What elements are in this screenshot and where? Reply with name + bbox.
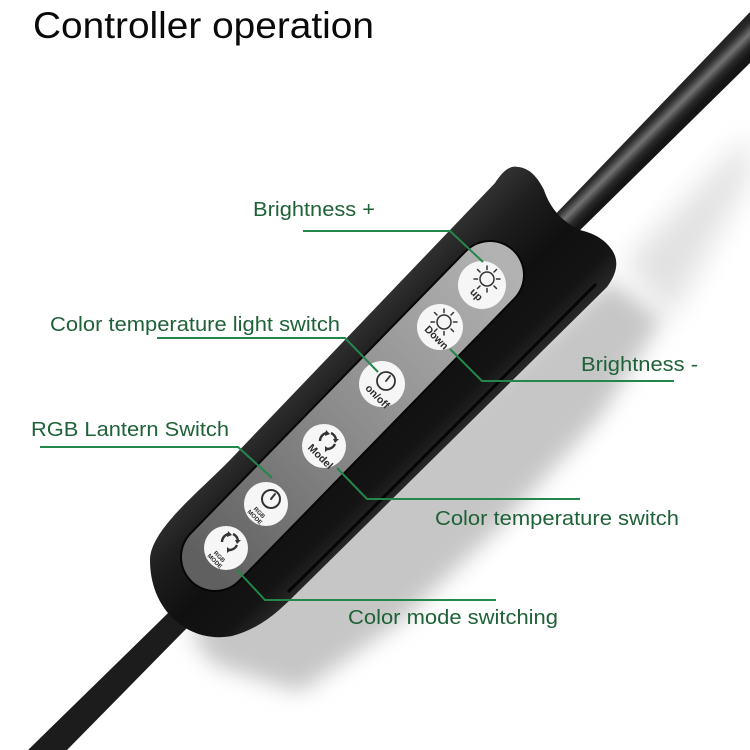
button: color mode: [204, 526, 248, 570]
controller: [150, 167, 616, 637]
button: on/off: [359, 361, 405, 412]
shadow beneath controller: [190, 280, 662, 692]
button: up: [458, 261, 506, 309]
leader line: brightness -: [450, 349, 674, 381]
button: rgb switch: MODE: [246, 509, 263, 526]
label: rgb lantern switch: RGB Lantern Switch: [31, 419, 229, 441]
light streak shadow beside cable: [625, 135, 750, 320]
cable: bottom left: [28, 596, 205, 750]
leader line: color mode switching: [237, 570, 496, 600]
leader line: color temperature light switch: [157, 338, 378, 372]
controller side groove: [288, 284, 596, 592]
label: color temperature light switch: Color temperature light switch: [50, 314, 340, 336]
leader line: rgb lantern switch: [40, 447, 272, 478]
label: color mode switching: Color mode switching: [348, 607, 558, 629]
button: model: [302, 424, 346, 472]
button: model: Model: [305, 442, 335, 472]
button: on/off: on/off: [363, 382, 392, 412]
cable: top right: [545, 12, 750, 240]
title: Controller operation: [33, 5, 374, 46]
button: color mode: RGB: [212, 550, 226, 565]
label: brightness +: Brightness +: [253, 199, 375, 221]
button: down: Down: [422, 324, 450, 352]
button: up: up: [467, 286, 485, 304]
button plate: [215, 275, 490, 557]
leader line: brightness +: [303, 231, 483, 262]
button: down: [417, 304, 463, 352]
button: rgb switch: RGB: [252, 506, 266, 521]
controller body: [150, 167, 616, 637]
button: rgb switch: [244, 482, 288, 526]
label: color temperature switch: Color temperature switch: [435, 508, 679, 530]
leader line: color temperature switch: [337, 468, 580, 499]
button: color mode: MODE: [206, 553, 223, 570]
label: brightness -: Brightness -: [581, 354, 698, 376]
